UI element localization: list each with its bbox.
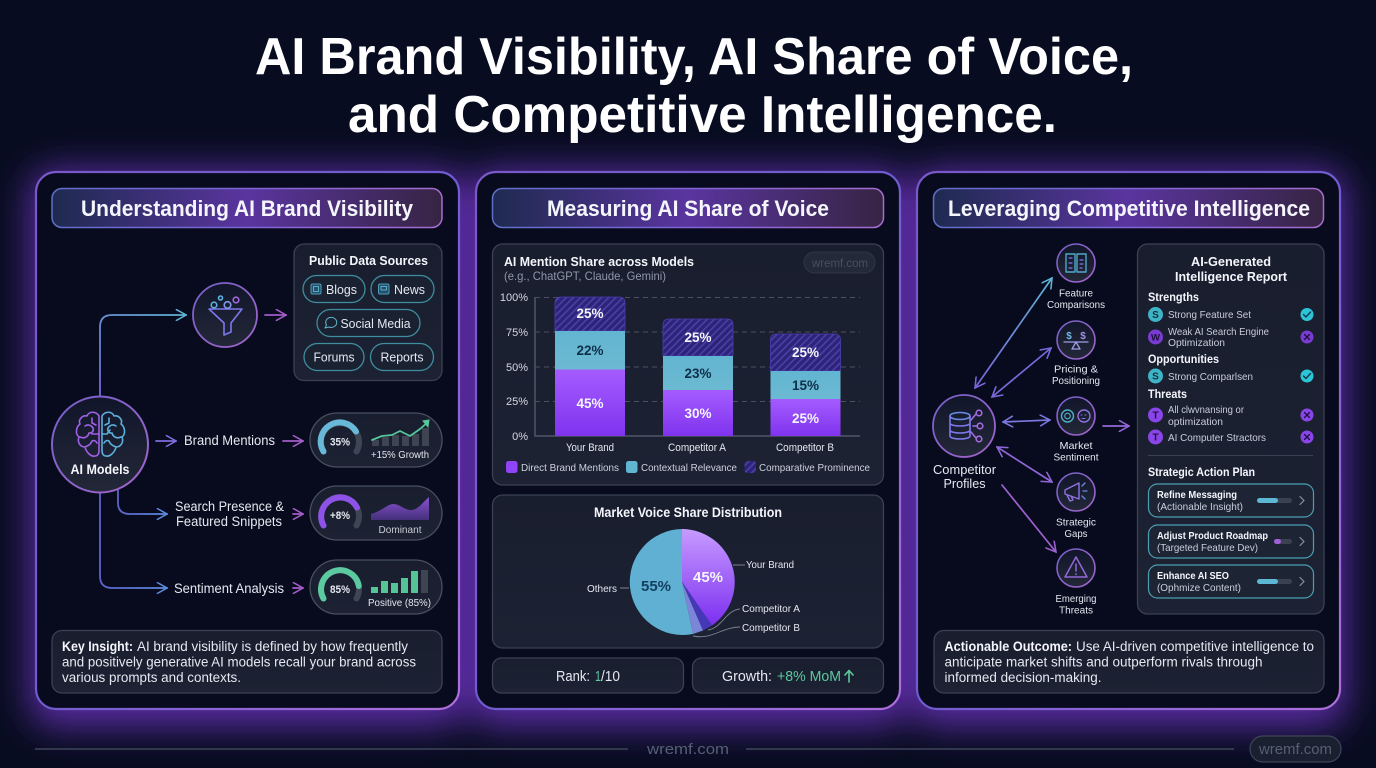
chart card: market voice share [492,495,884,648]
legend [506,461,870,474]
title [255,28,1133,144]
bar: competitor B: 15% [792,378,819,393]
tag: forums: Forums [314,350,355,364]
stacked bar chart [500,292,860,454]
legend: Comparative Prominence [759,462,870,474]
stacked bar chart: 100% [500,292,528,304]
tag: news [371,276,434,302]
heading: understanding [52,188,442,228]
bar: competitor A: 25% [684,330,712,345]
callout: actionable outcome: Actionable Outcome: [944,639,1072,654]
bar: competitor B: 25% [792,345,819,360]
report: opportunities: Strong Comparlsen [1168,371,1253,383]
bar: competitor A [663,319,733,454]
factor: feature comparisons: Feature [1059,288,1093,300]
footer: wremf.com [646,741,729,758]
callout: actionable outcome: Use AI-driven competitive intelligence to [1076,639,1314,654]
report: threats: optimization [1168,416,1223,428]
action: refine messaging [1148,484,1314,517]
factor: emerging threats: Emerging [1056,593,1097,605]
metric pill: positive 85 percent: Positive (85%) [368,597,431,609]
stat: growth: Growth: [722,669,772,685]
action: adjust product roadmap [1148,525,1314,558]
report: threats: T [1152,432,1159,444]
tag: news: News [394,282,425,297]
factor: emerging threats [1056,549,1097,616]
tag: blogs [303,276,365,302]
factor: market sentiment: Market [1060,440,1093,452]
callout: key insight: Key Insight: [62,639,133,654]
factor: pricing and positioning: Positioning [1052,375,1100,387]
bar: your brand: 25% [576,306,604,321]
callout: key insight: various prompts and contexts. [62,670,241,685]
callout: actionable outcome [934,630,1324,693]
bar: competitor A: Competitor A [668,442,727,454]
factor: market sentiment [1054,397,1099,464]
pie chart: 45% [693,569,723,586]
pie labels: Competitor B [742,622,800,634]
panel: measuring AI share of voice [476,172,900,709]
watermark: wremf.com [811,256,868,270]
report: opportunities: Opportunities [1148,352,1219,366]
bar: your brand: Your Brand [566,442,614,454]
report: threats: AI Computer Stractors [1168,432,1266,444]
bar: your brand: 45% [576,396,604,411]
action: adjust product roadmap: Adjust Product Roadmap [1157,530,1268,542]
factor: feature comparisons [1047,244,1105,311]
footer watermark [1250,736,1341,762]
icon: competitor profiles: Profiles [944,476,986,491]
factor: pricing and positioning: Pricing & [1054,364,1098,376]
heading: understanding: Understanding AI Brand Visibility [81,196,414,221]
chart card: market voice share: Market Voice Share Distribution [594,505,782,520]
arrows: profiles to factors [975,278,1129,552]
arrow: models to sentiment [100,493,167,588]
panel: leveraging competitive intelligence [917,172,1340,709]
report: strengths [1148,290,1314,349]
factor: emerging threats: Threats [1059,604,1093,616]
tag: blogs: Blogs [326,282,357,297]
title: and Competitive Intelligence. [348,86,1057,144]
pie chart: 55% [641,578,671,595]
row: brand mentions [156,413,442,467]
report: strengths: S [1152,310,1159,321]
panel: understanding AI brand visibility [36,172,459,709]
report: opportunities [1148,352,1314,384]
pie labels: Others [587,583,617,595]
factor: pricing and positioning: $ [1080,331,1086,342]
row: sentiment analysis: Sentiment Analysis [174,581,284,596]
report: strengths: Optimization [1168,337,1225,349]
stacked bar chart: 25% [506,396,528,408]
row: search presence [175,486,442,540]
metric pill: 35 percent growth [310,413,442,467]
action: adjust product roadmap: (Targeted Feature Dev) [1157,542,1258,554]
report: strengths: Strengths [1148,290,1199,304]
chart card: AI mention share: (e.g., ChatGPT, Claude, Gemini) [504,269,666,283]
report: strategic action plan [1148,465,1314,598]
callout: actionable outcome: anticipate market shifts and outperform rivals through [944,654,1262,670]
stat: growth [692,658,884,693]
chart card: AI mention share [492,244,884,485]
callout: key insight: AI brand visibility is defined by how frequently [137,639,408,654]
chart card: AI mention share: AI Mention Share across Models [504,254,694,269]
factor: strategic gaps [1056,473,1096,540]
bar: competitor B [770,334,840,454]
icon: AI models brain: AI Models [70,462,130,477]
report: threats: Threats [1148,387,1187,401]
pie labels: Your Brand [746,559,794,571]
footer [35,736,1341,762]
pie labels: Competitor A [742,603,800,615]
metric pill: 35 percent growth: 35% [330,436,350,448]
footer watermark: wremf.com [1258,742,1332,758]
bar: your brand [555,297,625,454]
callout: key insight: and positively generative AI models recall your brand across [62,654,416,670]
heading: leveraging [934,188,1324,228]
bar: competitor A: 30% [684,406,712,421]
stacked bar chart: 50% [506,362,528,374]
metric pill: positive 85 percent [310,560,442,614]
report: opportunities: S [1152,372,1159,382]
stat: rank [492,658,684,693]
panel: public data sources [294,244,442,380]
panel: AI-generated intelligence report [1138,244,1324,614]
legend: Contextual Relevance [641,462,737,474]
report: threats: T [1152,410,1159,422]
action: enhance AI SEO: (Ophmize Content) [1157,582,1241,594]
pie labels [587,559,800,637]
metric pill: positive 85 percent: 85% [330,584,350,596]
report: threats: All clwvnansing or [1168,404,1244,416]
panel: AI-generated intelligence report: Intelligence Report [1175,269,1288,284]
row: search presence: Search Presence & [175,499,284,514]
metric pill: dominant [310,486,442,540]
arrow: funnel to sources [265,314,286,316]
report: strengths: W [1151,332,1160,344]
stacked bar chart: 0% [512,431,528,443]
stat: rank: Rank: [556,669,590,685]
row: brand mentions: Brand Mentions [184,433,275,448]
icon: AI models brain [52,396,148,492]
watermark [804,252,875,273]
heading: measuring [492,188,884,228]
stat: rank: /10 [601,669,620,685]
callout: key insight [52,630,442,693]
panel: public data sources: Public Data Sources [309,253,428,268]
bar: your brand: 22% [576,343,604,358]
factor: pricing and positioning: $ [1066,331,1072,342]
stat: growth: +8% MoM [777,669,841,685]
stat: rank: 1 [595,669,601,685]
callout: actionable outcome: informed decision-making. [944,670,1102,685]
stacked bar chart: 75% [506,327,528,339]
icon: funnel [193,283,257,347]
title: AI Brand Visibility, AI Share of Voice, [255,28,1133,86]
report: threats [1148,387,1314,444]
arrow: models to funnel [100,315,186,396]
bar: competitor A: 23% [684,366,712,381]
action: refine messaging: Refine Messaging [1157,489,1237,501]
report: strengths: Weak AI Search Engine [1168,326,1269,338]
heading: leveraging: Leveraging Competitive Intelligence [948,196,1310,221]
icon: competitor profiles: Competitor [933,462,997,477]
tag: forums [304,344,364,370]
metric pill: dominant: Dominant [378,524,422,536]
factor: pricing and positioning [1052,321,1100,387]
heading: measuring: Measuring AI Share of Voice [547,196,829,221]
bar: competitor B: 25% [792,411,819,426]
legend: Direct Brand Mentions [521,462,619,474]
factor: strategic gaps: Strategic [1056,516,1096,528]
metric pill: dominant: +8% [330,510,350,522]
bar: competitor B: Competitor B [776,442,834,454]
tag: social media: Social Media [340,316,411,331]
factor: market sentiment: Sentiment [1054,452,1099,464]
pie chart [630,529,735,635]
tag: social media [317,310,420,336]
metric pill: 35 percent growth: +15% Growth [371,449,429,461]
tag: reports [370,344,434,370]
row: sentiment analysis [174,560,442,614]
action: enhance AI SEO: Enhance AI SEO [1157,570,1229,582]
report: strategic action plan: Strategic Action Plan [1148,465,1255,479]
report: strengths: Strong Feature Set [1168,309,1251,321]
tag: reports: Reports [380,350,424,364]
panel: AI-generated intelligence report: AI-Generated [1191,254,1271,269]
action: enhance AI SEO [1148,565,1314,598]
row: search presence: Featured Snippets [176,514,282,529]
icon: competitor profiles [933,395,997,491]
factor: feature comparisons: Comparisons [1047,299,1105,311]
arrow: models to search [118,490,167,514]
factor: strategic gaps: Gaps [1064,528,1088,540]
action: refine messaging: (Actionable Insight) [1157,501,1243,513]
